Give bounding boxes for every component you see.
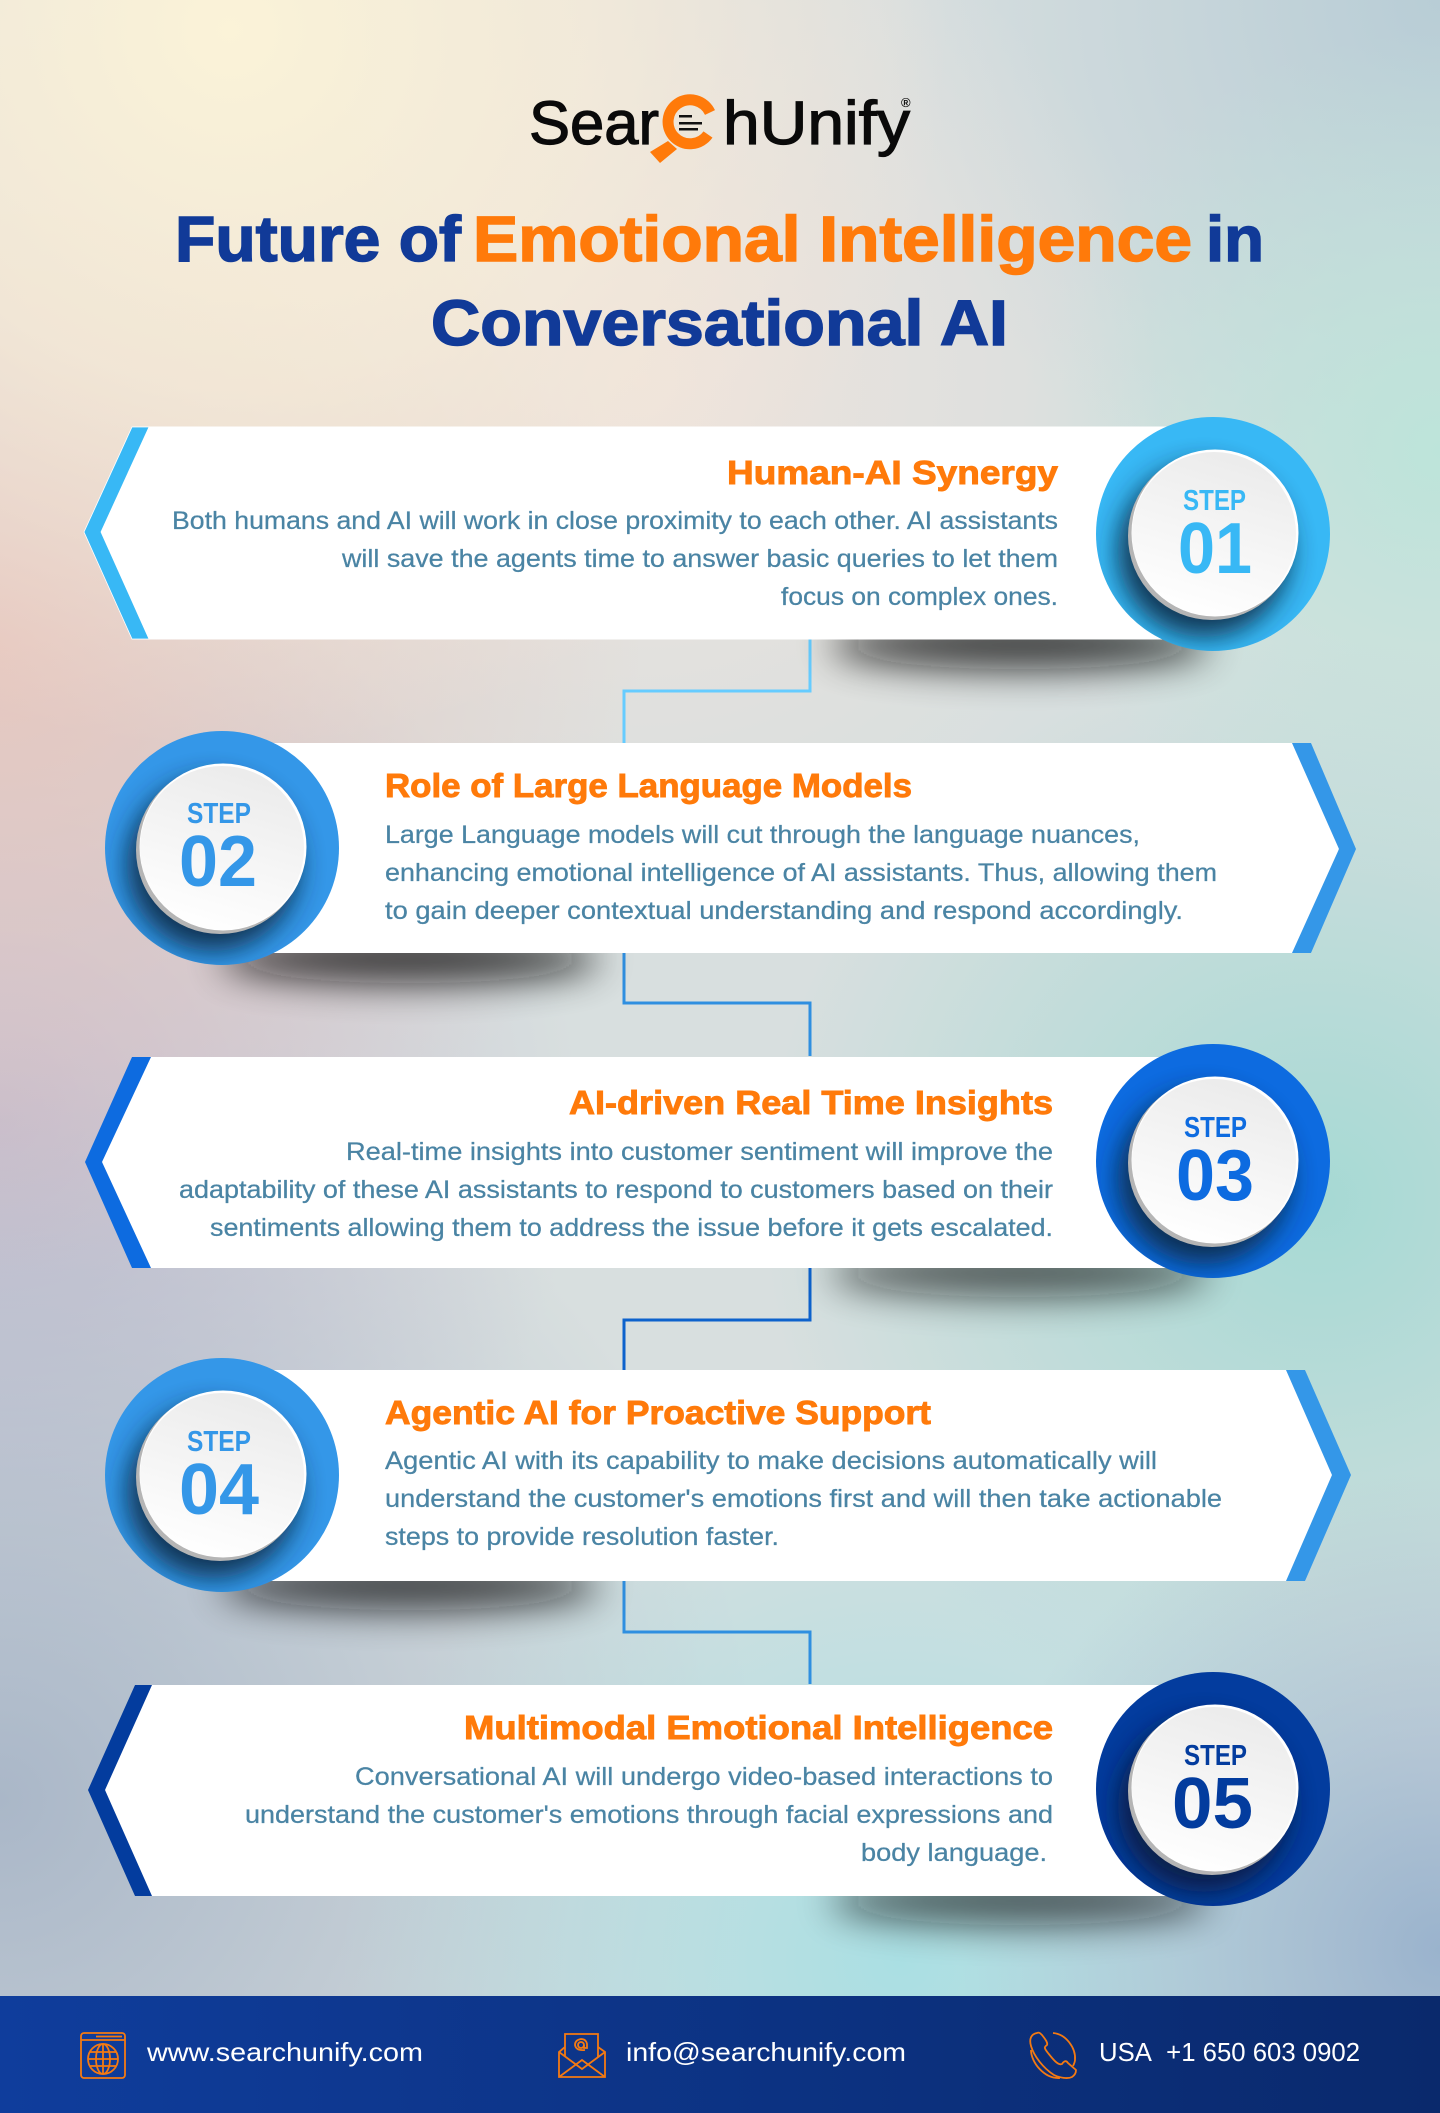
connector: step 4 to 5 (624, 1580, 810, 1684)
heading: Multimodal Emotional Intelligence (464, 1709, 1053, 1746)
logo: SearchUnify: Sear (529, 89, 659, 157)
chevron (1286, 1370, 1351, 1581)
logo: SearchUnify (529, 89, 911, 163)
panel: step 4 Agentic AI for Proactive Support (105, 1358, 1351, 1610)
footer band (0, 1996, 1440, 2113)
title: Emotional Intelligence (473, 203, 1192, 275)
step badge 01: STEP (1183, 485, 1246, 517)
body text: Large Language models will cut through the language nuances, (385, 821, 1140, 849)
icon: envelope (559, 2034, 605, 2077)
text: email: info@searchunify.com (626, 2037, 906, 2067)
body text (245, 1763, 1053, 1867)
panel: step 2 Role of Large Language Models (105, 731, 1356, 983)
connector: step 1 to 2 (624, 639, 810, 743)
title: Future of (175, 203, 462, 275)
step badge 02: STEP (187, 798, 251, 830)
connector: step 3 to 4 (624, 1267, 810, 1370)
title: Conversational AI (431, 287, 1008, 359)
body text: will save the agents time to answer basic queries to let them (341, 545, 1058, 573)
step badge 02 (105, 731, 339, 965)
body text (179, 1138, 1053, 1242)
panel: step 5 Multimodal Emotional Intelligence (88, 1672, 1330, 1925)
step badge 01: 01 (1178, 509, 1252, 589)
body text: Conversational AI will undergo video-based interactions to (355, 1763, 1053, 1791)
step badge 05 (1096, 1672, 1330, 1906)
body text: enhancing emotional intelligence of AI assistants. Thus, allowing them (385, 859, 1217, 887)
text: website: www.searchunify.com (146, 2037, 423, 2067)
heading: Agentic AI for Proactive Support (385, 1394, 931, 1431)
text: phone number: USA +1 650 603 0902 (1099, 2037, 1360, 2067)
step badge 03 (1096, 1044, 1330, 1278)
heading: Role of Large Language Models (385, 767, 912, 804)
icon: magnifier letter C (650, 100, 710, 163)
step badge 03: 03 (1176, 1136, 1254, 1216)
step badge 04 (105, 1358, 339, 1592)
body text: focus on complex ones. (781, 583, 1058, 611)
chevron (1292, 743, 1356, 953)
panel: step 3 AI-driven Real Time Insights (85, 1044, 1330, 1297)
heading: AI-driven Real Time Insights (569, 1084, 1053, 1121)
body text: to gain deeper contextual understanding and respond accordingly. (385, 897, 1183, 925)
chevron (88, 1685, 152, 1896)
step badge 04: STEP (187, 1426, 251, 1458)
body text: understand the customer's emotions first and will then take actionable (385, 1485, 1222, 1513)
icon: phone (1030, 2033, 1076, 2078)
step badge 02: 02 (179, 822, 257, 902)
chevron (85, 1057, 151, 1268)
chevron (84, 427, 149, 639)
body text: Real-time insights into customer sentiment will improve the (346, 1138, 1053, 1166)
logo: SearchUnify: hUnify (723, 89, 911, 157)
body text: steps to provide resolution faster. (385, 1523, 779, 1551)
step badge 04: 04 (179, 1450, 259, 1530)
step badge 03: STEP (1184, 1112, 1247, 1144)
step badge 05: STEP (1184, 1740, 1247, 1772)
step badge 05: 05 (1172, 1764, 1253, 1844)
panel: step 1 Human-AI Synergy (84, 417, 1330, 669)
body text: Agentic AI with its capability to make decisions automatically will (385, 1447, 1157, 1475)
body text (172, 507, 1058, 611)
body text: Both humans and AI will work in close proximity to each other. AI assistants (172, 507, 1058, 535)
body text: understand the customer's emotions through facial expressions and (245, 1801, 1053, 1829)
body text: sentiments allowing them to address the issue before it gets escalated. (210, 1214, 1053, 1242)
connector: step 2 to 3 (624, 953, 810, 1056)
body text: adaptability of these AI assistants to respond to customers based on their (179, 1176, 1053, 1204)
body text (385, 821, 1217, 925)
step badge 01 (1096, 417, 1330, 651)
icon: globe window (81, 2033, 125, 2078)
title: in (1206, 203, 1264, 275)
logo: SearchUnify: ® (901, 95, 911, 110)
title (175, 203, 1264, 359)
body text (385, 1447, 1222, 1551)
body text: body language. (861, 1839, 1047, 1867)
heading: Human-AI Synergy (727, 454, 1059, 491)
